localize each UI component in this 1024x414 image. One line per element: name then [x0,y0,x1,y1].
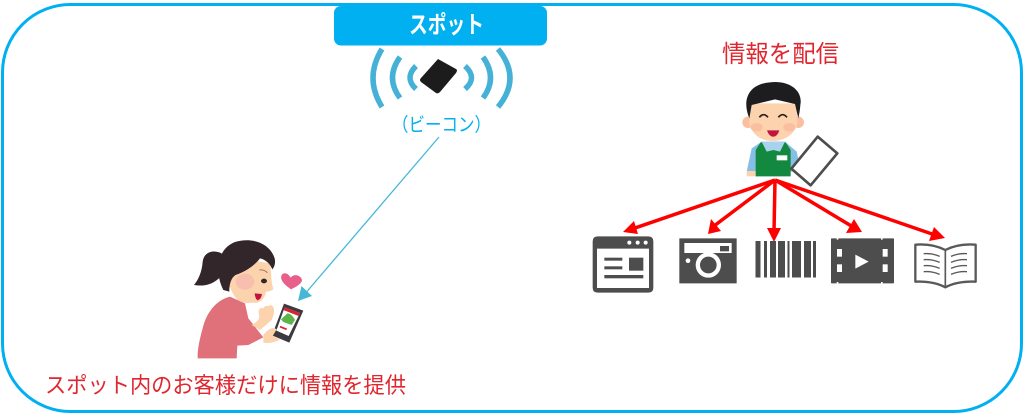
hand holding phone [263,328,280,343]
sweater [198,297,263,358]
smartphone [272,304,303,343]
icon: browser window [593,236,653,293]
heading: spot tab: スポット [409,12,484,39]
arms and shirt [747,142,801,172]
label: beacon: （ビーコン） [392,114,491,136]
icon: beacon with signal waves [373,49,510,107]
icon: barcode [756,241,816,278]
eye and brow [261,279,267,283]
caption: information only for customers in the spot: スポット内のお客様だけに情報を提供 [45,373,406,398]
heading: spot tab [334,6,547,46]
face and neck [230,260,273,303]
face [749,103,797,141]
arrows: staff to content icons [623,180,945,242]
apron [756,142,791,176]
label: information distribution: 情報を配信 [722,41,839,68]
tablet [791,137,837,185]
hair [218,240,275,292]
heart [281,273,302,289]
mouth [767,130,779,137]
eyes [759,115,787,117]
icon: camera [679,238,737,283]
arrow: beacon to smartphone [298,137,439,301]
hair [746,82,801,118]
ears [742,117,754,128]
ear and cheek [229,275,241,290]
illustration: woman with smartphone [194,240,303,358]
illustration: staff member with tablet [742,82,837,185]
hand raised [252,305,274,330]
icon: film strip [831,238,894,284]
icon: open book [915,244,976,287]
ponytail [194,251,223,286]
mouth [255,293,262,300]
